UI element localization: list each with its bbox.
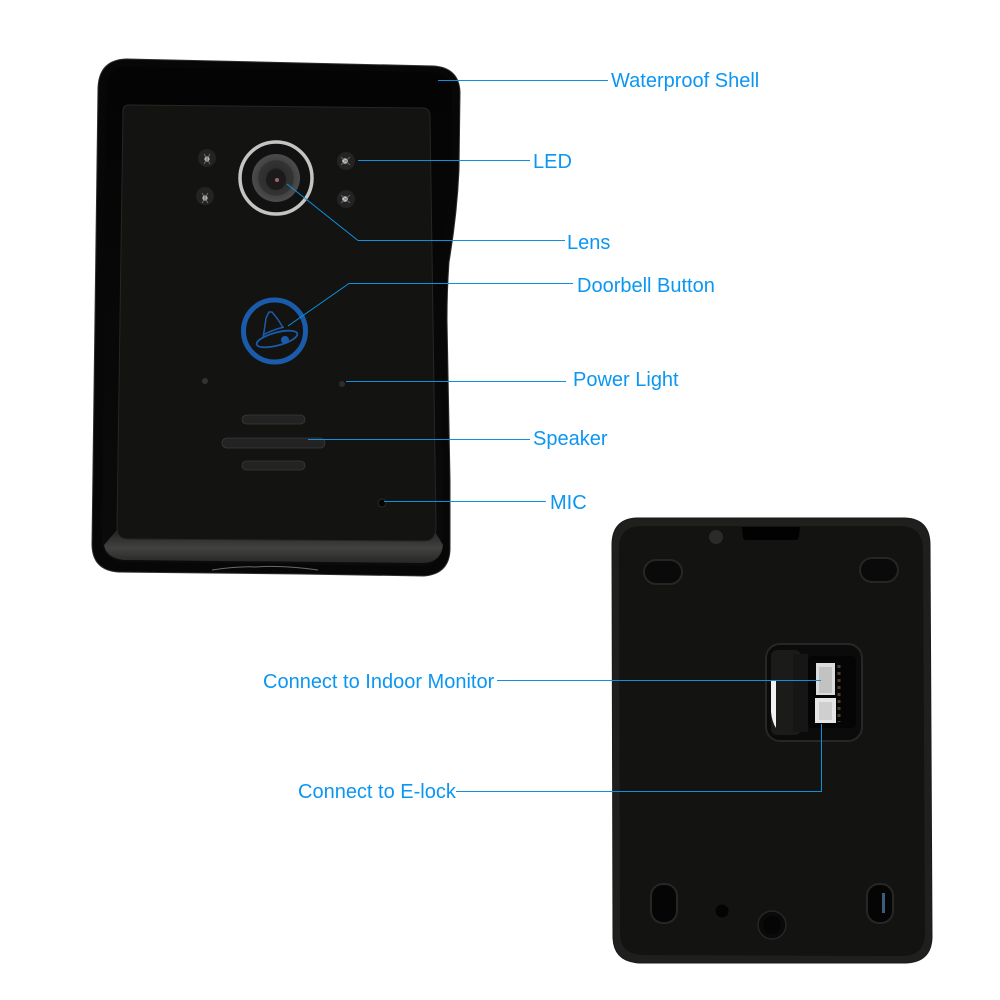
- icon: LED top left: [198, 149, 216, 167]
- icon: LED bottom right: [337, 190, 355, 208]
- callout: Lens: Lens: [567, 232, 610, 254]
- shell bottom grey lip: [104, 530, 443, 563]
- e-lock connector: [815, 698, 836, 723]
- mic hole: [378, 499, 386, 507]
- icon: camera lens: [240, 142, 312, 214]
- callout: Doorbell Button: Doorbell Button: [577, 275, 715, 297]
- mounting slot bottom left: [651, 884, 677, 923]
- white sticker strip: [771, 680, 776, 728]
- power light hole left: [202, 378, 208, 384]
- indoor monitor connector: [816, 663, 835, 695]
- callout: Connect to E-lock: Connect to E-lock: [298, 781, 457, 803]
- power light hole right: [339, 381, 345, 387]
- icon: doorbell button: [244, 300, 306, 362]
- connector opening: [766, 644, 862, 741]
- screw hole: [758, 911, 786, 939]
- callout: LED: LED: [533, 151, 572, 173]
- shell bottom glint: [212, 566, 318, 570]
- callout: Power Light: Power Light: [573, 369, 679, 391]
- callout: Connect to E-lock: [298, 724, 822, 803]
- top cable notch: [742, 527, 800, 540]
- callout: Lens: [287, 184, 610, 254]
- front panel: [117, 105, 436, 541]
- callout: Waterproof Shell: Waterproof Shell: [611, 70, 759, 92]
- connector pins: [838, 665, 840, 722]
- front unit: waterproof shell and door station: [92, 59, 460, 576]
- waterproof shell: [92, 59, 460, 576]
- back plate body: [612, 518, 932, 963]
- callout: Speaker: Speaker: [533, 428, 608, 450]
- speaker slot top: [242, 415, 305, 424]
- moulding mark: [709, 530, 723, 544]
- back plate inner edge: [619, 526, 925, 956]
- icon: LED top right: [337, 152, 355, 170]
- mounting slot bottom right: [867, 884, 893, 923]
- callout: Connect to Indoor Monitor: Connect to Indoor Monitor: [263, 671, 495, 693]
- callout: Doorbell Button: [288, 275, 715, 326]
- callout: MIC: MIC: [550, 492, 587, 514]
- icon: LED bottom left: [196, 187, 214, 205]
- speaker slot middle: [222, 438, 325, 448]
- mounting slot top left: [644, 560, 682, 584]
- small hole: [716, 904, 728, 918]
- shell inner tray: [102, 67, 452, 566]
- mounting slot top right: [860, 558, 898, 582]
- back plate: [612, 518, 932, 963]
- speaker slot bottom: [242, 461, 305, 470]
